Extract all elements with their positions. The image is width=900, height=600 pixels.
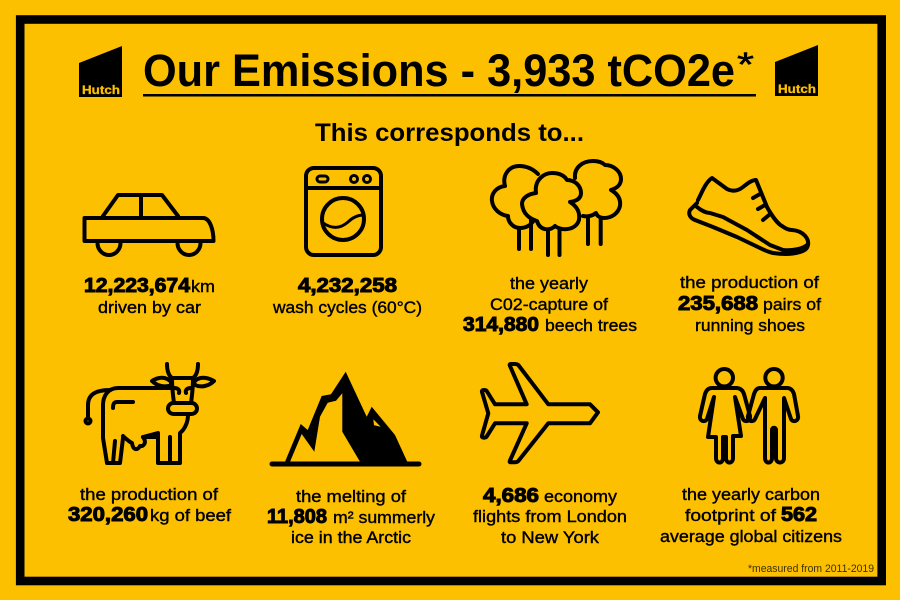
logo: right Hutch: Hutch (778, 82, 816, 96)
icon: cow (86, 364, 214, 463)
logo: right Hutch (775, 45, 818, 96)
text: beef: the production of (80, 485, 218, 504)
title: * (737, 46, 754, 84)
icon: melting iceberg (272, 372, 419, 464)
icon: car (84, 195, 214, 255)
text: citizens: average global citizens (660, 527, 842, 546)
text: beef: kg of beef (150, 506, 231, 525)
icon: plane (482, 364, 598, 462)
text: beef (68, 485, 231, 526)
text: shoes (678, 273, 821, 335)
text: shoes: the production of (680, 273, 819, 292)
footnote: *measured from 2011-2019 (748, 563, 874, 575)
icon: trees (492, 161, 621, 255)
icon: people (700, 369, 798, 462)
text: citizens: footprint of (685, 506, 776, 525)
text: shoes: running shoes (695, 316, 805, 335)
text: ice: ice in the Arctic (291, 528, 412, 547)
text: car: km (191, 277, 215, 296)
text: flights (473, 485, 627, 547)
text: car: driven by car (98, 298, 201, 317)
text: shoes: 235,688 (678, 293, 758, 315)
text: flights: to New York (501, 528, 600, 547)
text: trees: the yearly (510, 274, 589, 293)
text: car: 12,223,674 (84, 275, 191, 297)
text: ice (267, 487, 436, 547)
subtitle: This corresponds to... (315, 119, 584, 147)
text: trees (463, 274, 637, 336)
text: trees: 314,880 (463, 314, 539, 336)
text: flights: flights from London (473, 507, 627, 526)
text: wash cycles: wash cycles (60°C) (272, 298, 422, 317)
text: shoes: pairs of (763, 295, 821, 314)
text: trees: C02-capture of (490, 295, 608, 314)
icon: running shoe (689, 178, 808, 254)
logo: left Hutch (79, 46, 122, 97)
text: ice: m² summerly (333, 508, 436, 527)
text: flights: economy (544, 487, 618, 506)
icon: washing machine (306, 168, 381, 255)
text: citizens: 562 (781, 504, 817, 526)
text: car (84, 275, 215, 317)
logo: left Hutch: Hutch (82, 83, 120, 97)
text: citizens: the yearly carbon (682, 485, 820, 504)
text: trees: beech trees (545, 316, 637, 335)
text: flights: 4,686 (483, 485, 539, 507)
text: wash cycles (272, 275, 422, 317)
text: beef: 320,260 (68, 504, 148, 526)
text: citizens (660, 485, 842, 546)
title: Our Emissions - 3,933 tCO2e (143, 45, 735, 96)
text: wash cycles: 4,232,258 (298, 275, 397, 297)
text: ice: 11,808 (267, 506, 327, 528)
text: ice: the melting of (296, 487, 406, 506)
